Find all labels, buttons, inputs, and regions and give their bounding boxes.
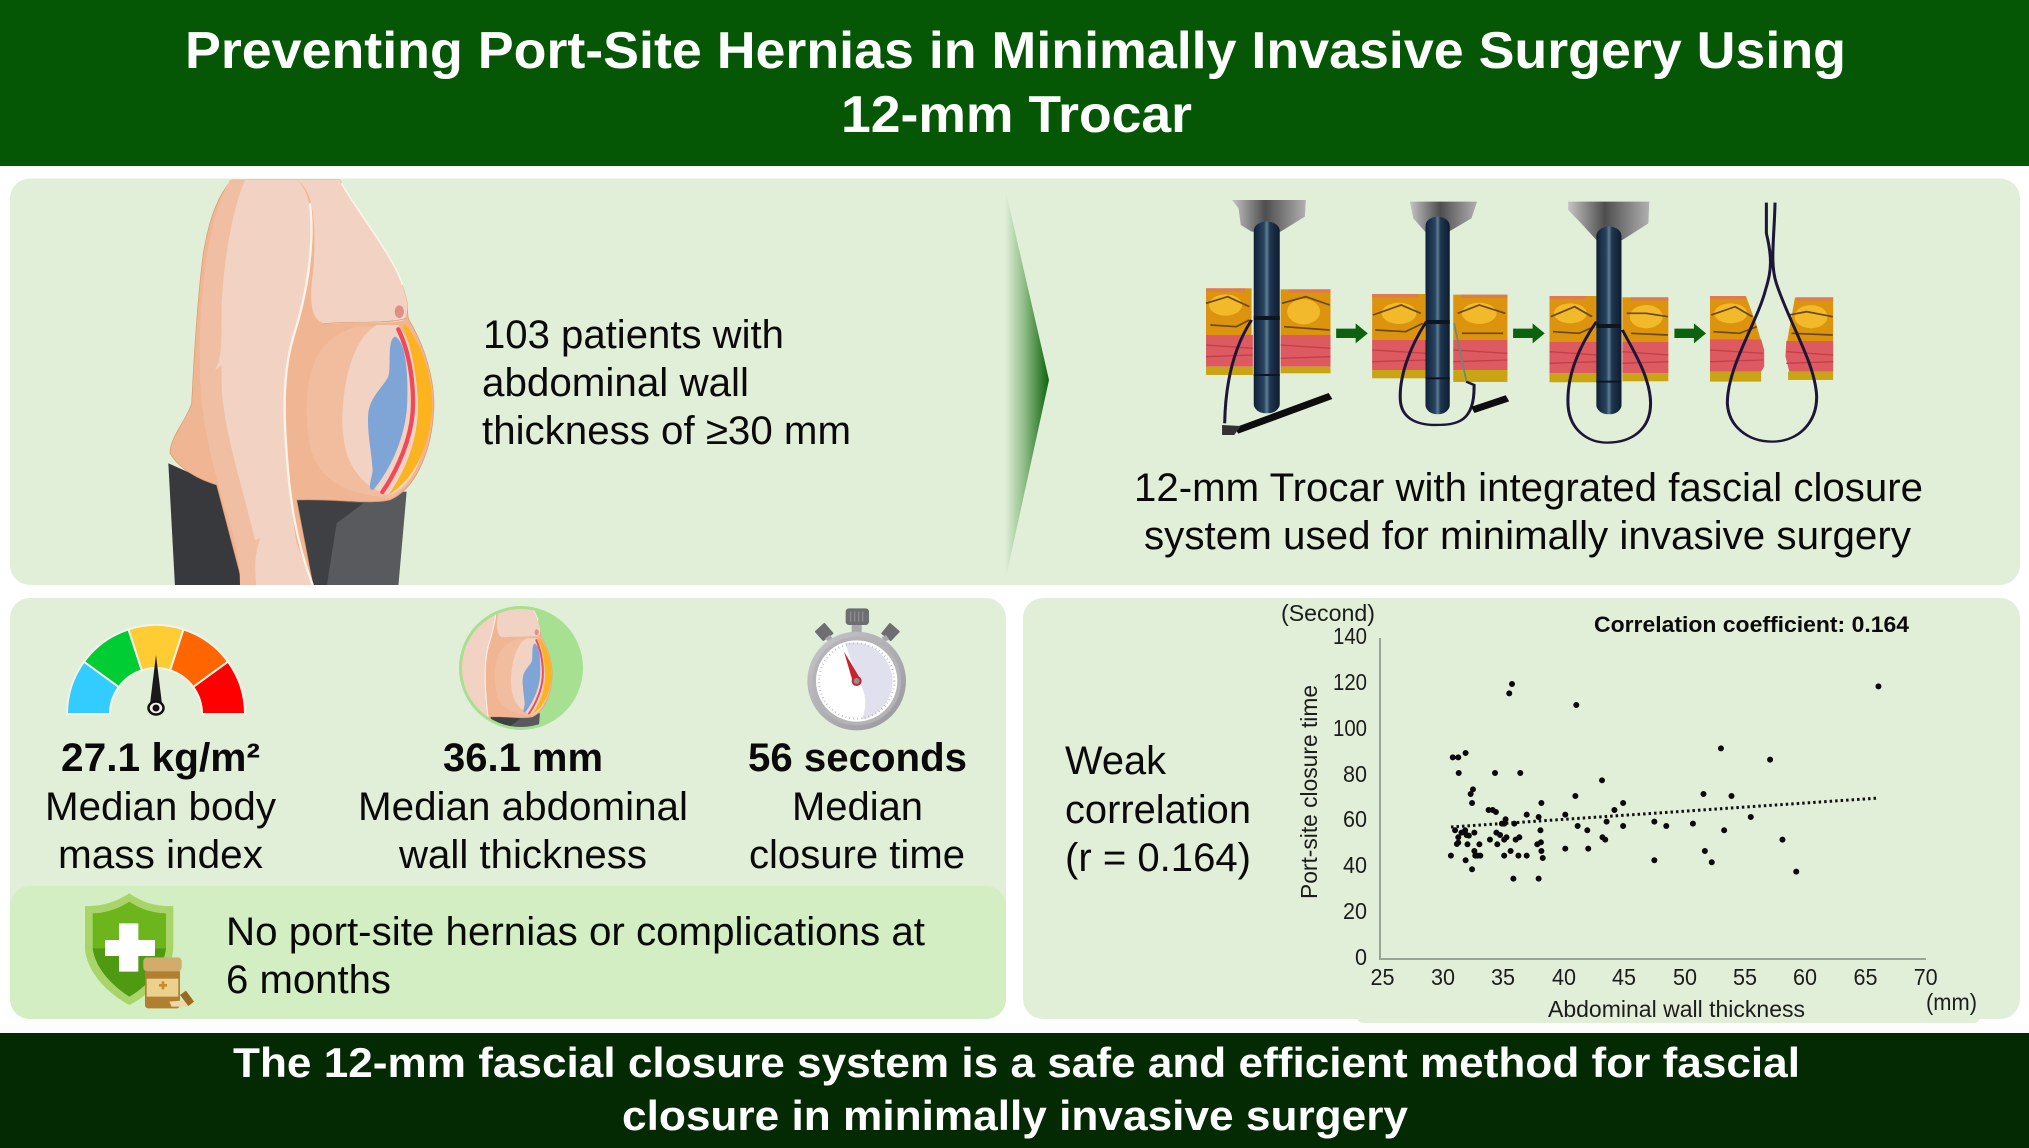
arrow	[1336, 323, 1368, 343]
text: trocar caption: 12-mm Trocar with integrated fascial closure	[1134, 466, 1923, 510]
panel: patients and trocar system	[10, 178, 2020, 587]
icon: stopwatch	[807, 608, 906, 730]
text: weak correlation: Weak	[1065, 739, 1166, 783]
metric: closure time: closure time	[749, 833, 965, 877]
metric: closure time: 56 seconds	[748, 736, 967, 780]
trend line	[1451, 798, 1879, 827]
metric: body mass index: mass index	[58, 833, 263, 877]
axis titles	[1281, 600, 1977, 1022]
x axis labels: 35	[1491, 964, 1515, 990]
scatter chart	[1281, 600, 1977, 1022]
y axis labels: 0	[1355, 944, 1367, 970]
metric: abdominal wall thickness: 36.1 mm	[443, 736, 603, 780]
y axis labels: 60	[1343, 806, 1367, 832]
title banner: 12-mm Trocar	[841, 85, 1192, 143]
metric: abdominal wall thickness: wall thickness	[398, 833, 647, 877]
text: outcome at six months: No port-site hernias or complications at	[226, 910, 925, 954]
axes	[1380, 638, 1926, 959]
metric: abdominal wall thickness	[358, 736, 688, 877]
data points	[1451, 684, 1878, 879]
step 2	[1372, 202, 1507, 425]
step 3	[1550, 202, 1668, 443]
y axis labels: 20	[1343, 898, 1367, 924]
conclusion banner	[0, 1033, 2029, 1148]
x axis labels: 60	[1793, 964, 1817, 990]
x axis labels: 40	[1552, 964, 1576, 990]
x axis labels: 65	[1854, 964, 1878, 990]
step 4	[1710, 203, 1833, 442]
text: weak correlation	[1065, 739, 1251, 880]
arrow: chevron divider	[1005, 188, 1049, 582]
y axis labels: 120	[1333, 669, 1367, 695]
diagram: trocar closure steps	[1206, 200, 1833, 443]
conclusion banner: closure in minimally invasive surgery	[622, 1092, 1408, 1139]
title banner	[0, 0, 2029, 166]
y axis labels	[1333, 623, 1367, 970]
correlation label: Correlation coefficient: 0.164	[1594, 612, 1909, 637]
text: patient population	[482, 313, 851, 453]
icon: BMI gauge	[67, 625, 245, 714]
x axis labels: 70	[1914, 964, 1938, 990]
x axis labels: 45	[1612, 964, 1636, 990]
text: patient population: abdominal wall	[482, 361, 749, 405]
y axis labels: 80	[1343, 761, 1367, 787]
metric: body mass index	[45, 736, 276, 877]
text: weak correlation: (r = 0.164)	[1065, 836, 1251, 880]
axis titles: (Second)	[1281, 600, 1375, 626]
text: outcome at six months: 6 months	[226, 958, 391, 1002]
metric: body mass index: 27.1 kg/m²	[61, 736, 260, 780]
x axis labels: 25	[1370, 964, 1394, 990]
text: patient population: thickness of ≥30 mm	[482, 409, 851, 453]
conclusion banner: The 12-mm fascial closure system is a safe and efficient method for fascial	[233, 1039, 1800, 1086]
panel: median results	[0, 573, 2029, 1148]
metric: closure time: Median	[792, 785, 923, 829]
metric: closure time	[748, 736, 967, 877]
y axis labels: 140	[1333, 623, 1367, 649]
axis titles: Abdominal wall thickness	[1548, 996, 1805, 1022]
y axis labels: 40	[1343, 852, 1367, 878]
arrow	[1513, 323, 1545, 343]
y axis labels: 100	[1333, 715, 1367, 741]
text: weak correlation: correlation	[1065, 788, 1251, 832]
x axis labels: 50	[1673, 964, 1697, 990]
illustration: obese torso with abdominal wall layers	[168, 180, 434, 587]
x axis labels: 30	[1431, 964, 1455, 990]
axis titles: Port-site closure time	[1296, 685, 1322, 899]
icon: abdominal wall thickness	[459, 606, 583, 730]
text: outcome at six months	[226, 910, 925, 1002]
title banner: Preventing Port-Site Hernias in Minimally Invasive Surgery Using	[185, 21, 1846, 79]
step 1	[1206, 200, 1330, 435]
x axis labels: 55	[1733, 964, 1757, 990]
text: trocar caption: system used for minimally invasive surgery	[1144, 514, 1911, 558]
axis titles: (mm)	[1926, 989, 1977, 1015]
text: trocar caption	[1134, 466, 1923, 558]
metric: abdominal wall thickness: Median abdominal	[358, 785, 688, 829]
arrow	[1674, 323, 1706, 343]
x axis labels	[1370, 964, 1938, 990]
metric: body mass index: Median body	[45, 785, 276, 829]
text: patient population: 103 patients with	[483, 313, 784, 357]
icon: shield and medicine bottle	[85, 893, 194, 1008]
callout: no hernias or complications	[10, 886, 1006, 1019]
panel: correlation	[1023, 598, 2020, 1023]
